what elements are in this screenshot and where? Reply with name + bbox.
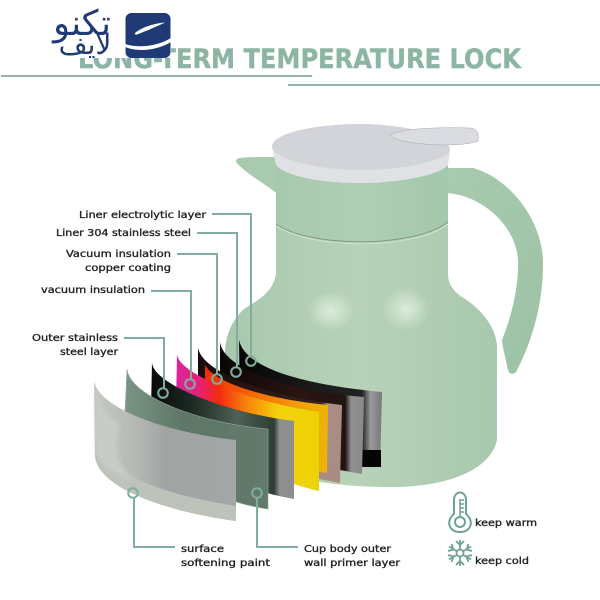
logo backing <box>40 0 171 58</box>
layer: 304 stainless steel <box>220 342 364 474</box>
layer: copper coating <box>205 365 328 473</box>
layer: primer <box>125 369 268 509</box>
label: outer stainless steel layer <box>32 333 168 398</box>
title underline right <box>288 84 600 86</box>
body highlight right <box>382 287 430 331</box>
label: vacuum insulation <box>41 285 195 389</box>
layer: copper backing <box>198 348 342 483</box>
layer: outer stainless steel <box>151 362 294 499</box>
logo mark <box>125 13 171 58</box>
label: vacuum insulation copper coating: Vacuum insulation <box>66 249 171 260</box>
label: surface softening paint: softening paint <box>181 558 270 569</box>
layer: softening paint <box>94 381 236 521</box>
kettle neck <box>276 160 448 242</box>
label: cup body outer wall primer layer: wall primer layer <box>304 558 401 569</box>
label: surface softening paint <box>128 488 270 569</box>
logo text: تكنو <box>51 4 111 44</box>
layer: electrolytic <box>239 340 382 467</box>
icon: thermometer <box>449 492 471 532</box>
label: vacuum insulation copper coating <box>66 249 222 384</box>
logo text: لايف <box>59 28 111 61</box>
kettle <box>225 124 543 487</box>
label: liner electrolytic layer <box>79 210 256 366</box>
insulation layers <box>94 340 382 521</box>
label: outer stainless steel layer: steel layer <box>60 347 119 358</box>
label: vacuum insulation: vacuum insulation <box>41 285 145 296</box>
logo <box>51 4 171 61</box>
kettle handle <box>440 168 543 374</box>
label: liner electrolytic layer: Liner electrolytic layer <box>79 210 207 221</box>
label: outer stainless steel layer: Outer stainless <box>32 333 118 344</box>
lid tab <box>390 128 478 145</box>
logo text <box>51 4 111 61</box>
keep warm text: keep warm <box>475 518 537 529</box>
title: LONG-TERM TEMPERATURE LOCK <box>78 44 522 75</box>
icon: snowflake <box>448 540 472 566</box>
label: vacuum insulation copper coating: copper coating <box>85 263 171 274</box>
body highlight left <box>307 291 355 331</box>
keep cold text: keep cold <box>475 556 529 567</box>
label: liner 304 stainless steel: Liner 304 stainless steel <box>56 228 191 239</box>
title underline left <box>1 75 312 77</box>
label: cup body outer wall primer layer <box>252 488 401 569</box>
lid <box>272 124 478 183</box>
layer: vacuum insulation <box>176 354 319 491</box>
kettle spout <box>236 157 282 195</box>
label: cup body outer wall primer layer: Cup body outer <box>304 544 392 555</box>
label: surface softening paint: surface <box>181 544 224 555</box>
pink strip under copper coating <box>319 465 340 483</box>
kettle body <box>225 215 497 487</box>
label: liner 304 stainless steel <box>56 228 241 377</box>
